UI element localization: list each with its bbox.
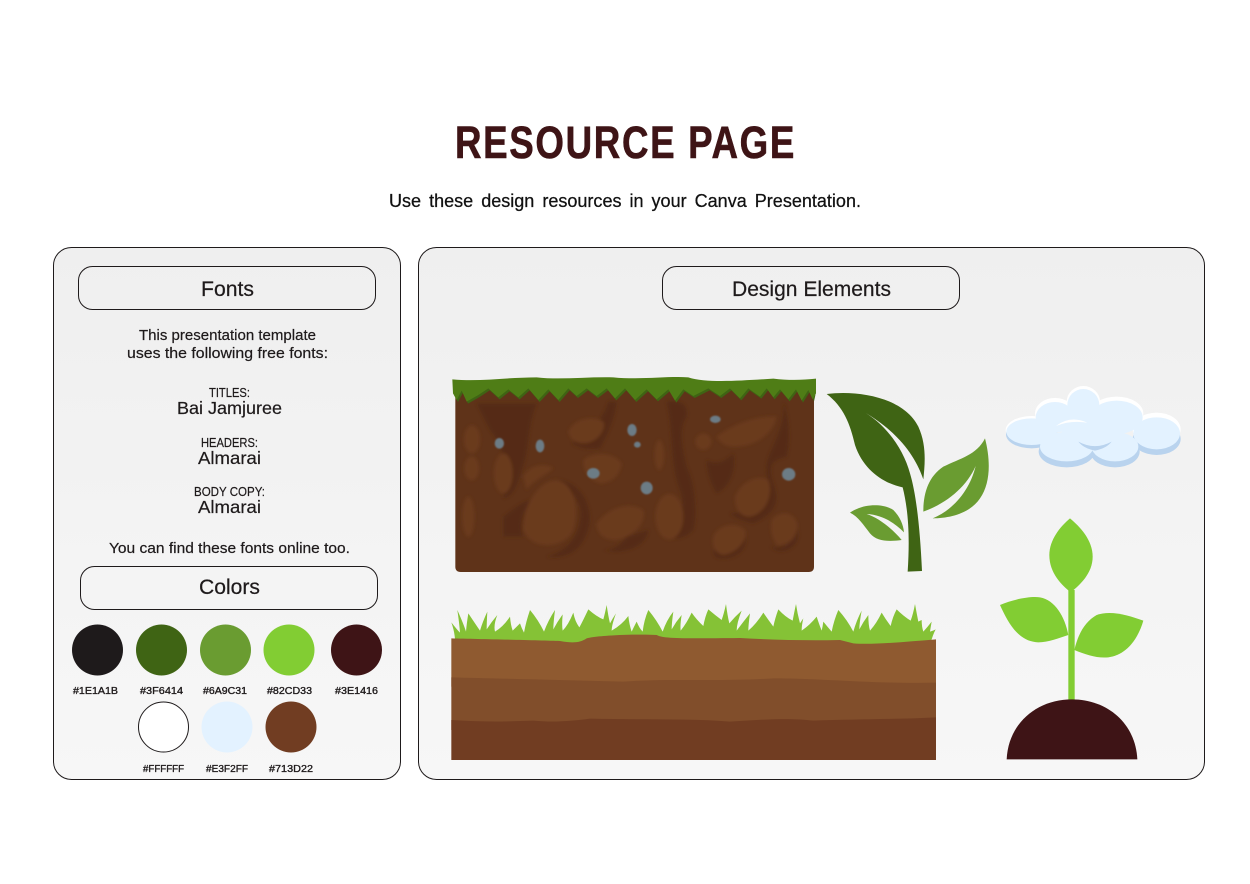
bottom soil layer — [451, 717, 936, 760]
heading: design elements: Design Elements — [732, 277, 891, 301]
swatch: 713D22 — [266, 702, 316, 775]
swatch: E3F2FF: #E3F2FF — [206, 763, 248, 775]
heading: fonts — [78, 266, 376, 310]
swatch: E3F2FF — [202, 702, 252, 775]
text block: body copy font — [194, 485, 265, 517]
panel: design elements — [418, 248, 1204, 780]
small leaf — [850, 505, 904, 541]
swatch: 3F6414 — [136, 624, 187, 697]
text block: fonts note: You can find these fonts online too. — [109, 541, 350, 557]
heading: colors — [80, 566, 378, 610]
swatch: 6A9C31: #6A9C31 — [203, 685, 247, 697]
text block: headers font — [198, 436, 261, 468]
panel: fonts and colors — [54, 248, 400, 780]
swatch: 82CD33 — [264, 624, 314, 697]
heading: fonts: Fonts — [201, 277, 254, 301]
swatch: 1E1A1B: #1E1A1B — [73, 685, 118, 697]
text block: fonts intro — [127, 328, 328, 362]
swatch: 6A9C31 — [200, 624, 251, 697]
text block: fonts intro: uses the following free fonts: — [127, 346, 328, 362]
subtitle: Use these design resources in your Canva Presentation. — [389, 191, 861, 211]
swatch: 3E1416: #3E1416 — [335, 685, 378, 697]
text block: titles font — [177, 386, 282, 418]
swatch: FFFFFF — [138, 702, 188, 775]
swatch: 1E1A1B — [72, 624, 123, 697]
grass blades — [451, 604, 936, 645]
illustration: cloud — [1006, 386, 1181, 467]
text block: titles font: Bai Jamjuree — [177, 398, 282, 418]
heading: design elements — [662, 266, 960, 310]
text block: fonts intro: This presentation template — [139, 328, 316, 344]
top soil layer — [451, 635, 936, 687]
big dark leaf with stem — [827, 393, 925, 572]
swatch: 713D22: #713D22 — [269, 763, 313, 775]
left leaf — [1000, 597, 1068, 642]
right leaf — [923, 438, 989, 518]
heading: colors: Colors — [199, 575, 260, 599]
right leaf — [1074, 613, 1143, 658]
middle soil layer — [451, 677, 936, 730]
text block: headers font: Almarai — [198, 448, 261, 468]
text block: titles font: TITLES: — [209, 386, 250, 400]
illustration: three-leaf sprout — [827, 393, 989, 572]
text block: headers font: HEADERS: — [201, 436, 258, 450]
text block: body copy font: BODY COPY: — [194, 485, 265, 499]
soil mound — [1007, 699, 1137, 759]
swatch: FFFFFF: #FFFFFF — [143, 763, 184, 775]
text block: body copy font: Almarai — [198, 497, 261, 517]
illustration: seedling in soil mound — [1000, 518, 1143, 759]
title: RESOURCE PAGE — [455, 117, 796, 168]
illustration: soil block with stones and grass top — [452, 377, 816, 572]
top leaf — [1049, 518, 1093, 592]
color swatches — [72, 624, 382, 775]
stem — [1068, 590, 1075, 702]
illustration: ground layers with grass — [451, 604, 936, 760]
swatch: 82CD33: #82CD33 — [267, 685, 312, 697]
swatch: 3F6414: #3F6414 — [140, 685, 183, 697]
swatch: 3E1416 — [331, 624, 382, 697]
